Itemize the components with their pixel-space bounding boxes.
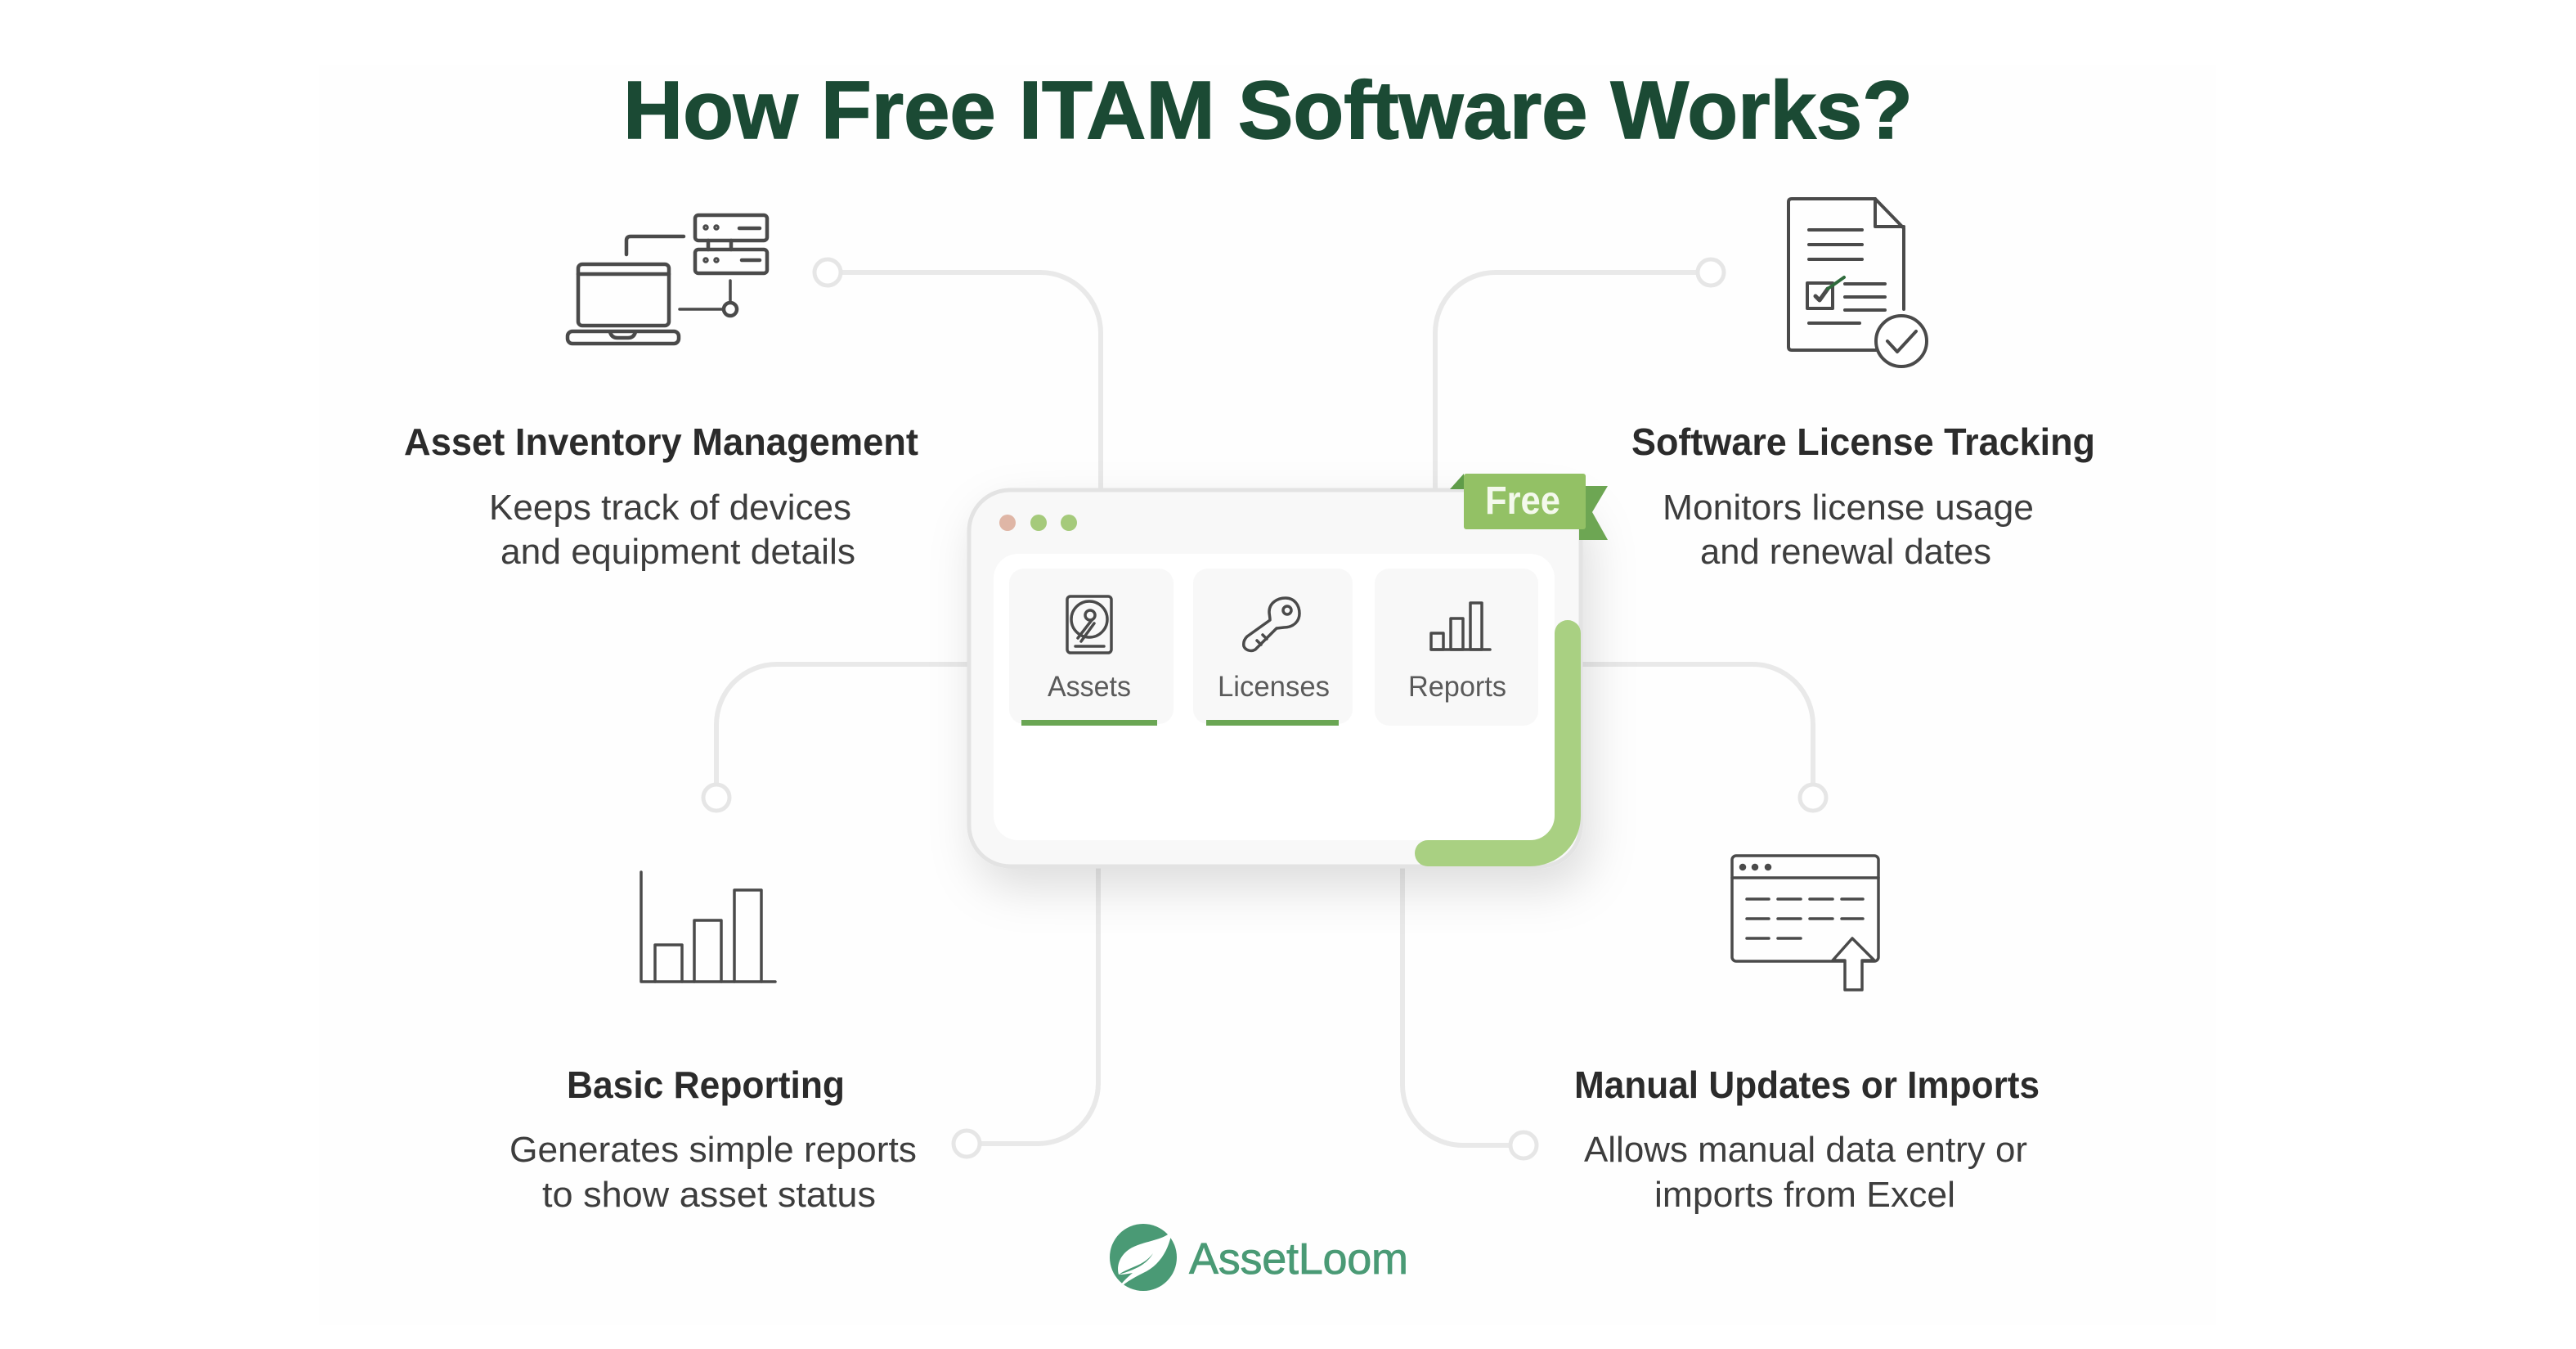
icon: key [1244,598,1299,650]
panel: asset inventory management [404,215,918,572]
description [489,488,855,572]
icon: bar chart [641,872,775,982]
panel: software license tracking [1631,199,2095,572]
description: Monitors license usage [1663,488,2034,528]
heading: Asset Inventory Management [404,420,918,463]
heading: Software License Tracking [1631,420,2095,463]
icon: spreadsheet window with upload arrow [1732,856,1878,990]
connector: bottom right [1402,866,1537,1158]
connector: middle right [1580,664,1826,811]
connector: middle left [703,664,970,811]
description: imports from Excel [1654,1175,1955,1215]
label: assets: Assets [1048,671,1131,703]
icon: laptop and servers [568,215,767,344]
label: licenses: Licenses [1218,671,1330,703]
heading: Basic Reporting [567,1063,845,1106]
active bar: licenses [1206,720,1339,726]
icon: license document [1788,199,1927,366]
connector: top right [1435,259,1724,491]
description [1663,488,2034,572]
logo wordmark: AssetLoom [1189,1234,1408,1284]
description: Generates simple reports [509,1130,917,1170]
panel: manual updates or imports [1574,856,2040,1215]
tab: reports [1375,569,1538,726]
description: and renewal dates [1700,532,1991,572]
connector: bottom left [954,866,1098,1157]
description: to show asset status [542,1175,876,1215]
panel: basic reporting [509,872,917,1215]
panel: central app window [969,474,1608,866]
free label: Free [1485,479,1560,523]
icon: bar chart small [1431,603,1490,650]
description: Keeps track of devices [489,488,851,528]
window content area [994,554,1555,840]
description: Allows manual data entry or [1584,1130,2027,1170]
logo mark [1110,1224,1177,1292]
free ribbon badge [1450,474,1608,540]
window control dots [999,515,1077,531]
description [1584,1130,2027,1215]
icon: hard drive [1067,596,1111,653]
active bar: assets [1021,720,1157,726]
logo: AssetLoom [1110,1224,1408,1292]
label: reports: Reports [1408,671,1506,703]
green corner accent [1428,633,1568,853]
description [509,1130,917,1215]
tab: licenses [1193,569,1353,726]
tab: assets [1009,569,1174,726]
description: and equipment details [500,532,855,572]
window frame [969,490,1581,866]
title: How Free ITAM Software Works? [623,65,1913,156]
connector: top left [815,259,1101,491]
heading: Manual Updates or Imports [1574,1063,2040,1106]
